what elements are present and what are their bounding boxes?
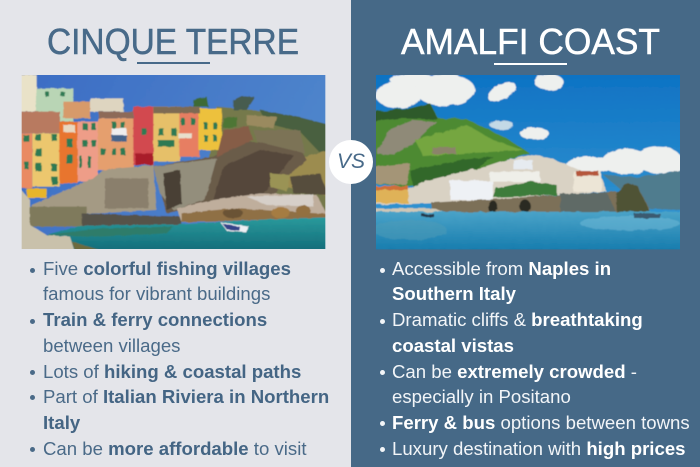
bullet list: Amalfi Coast facts — [380, 258, 690, 459]
photo: Amalfi town — [376, 75, 680, 250]
shutters — [23, 92, 217, 185]
cliffs — [153, 142, 307, 213]
heading: Amalfi Coast: AMALFI COAST — [401, 21, 660, 62]
bullet: ferry and bus: Ferry & bus options between towns — [392, 412, 690, 433]
bullet: train and ferry: Train & ferry connections — [43, 309, 267, 330]
bullet: cliffs: coastal vistas — [392, 335, 514, 356]
bullet: crowded: especially in Positano — [392, 386, 571, 407]
bullet: train and ferry: between villages — [43, 335, 180, 356]
clouds — [376, 73, 683, 174]
buildings — [20, 75, 37, 112]
bullet: Naples: Accessible from Naples in — [392, 258, 611, 279]
bullet: affordable: Can be more affordable to visit — [43, 438, 307, 459]
sea wall — [32, 165, 157, 213]
bullet: Naples: Southern Italy — [392, 283, 516, 304]
VS badge: VS — [337, 150, 365, 173]
bullet: Naples — [380, 258, 611, 304]
bullet: Italian Riviera: Part of Italian Riviera in Northern — [43, 386, 329, 407]
sea — [46, 216, 326, 249]
boats — [421, 213, 434, 217]
distant mountains — [603, 170, 683, 210]
bullet: hiking: Lots of hiking & coastal paths — [43, 361, 301, 382]
bullet: luxury: Luxury destination with high prices — [392, 438, 686, 459]
hill — [373, 103, 530, 187]
town — [373, 155, 607, 205]
foreground rocks — [22, 190, 75, 249]
VS badge — [329, 140, 373, 184]
bullet: Italian Riviera: Italy — [43, 412, 80, 433]
sea — [373, 212, 683, 253]
bullet: colorful fishing villages: famous for vibrant buildings — [43, 283, 270, 304]
heading underline — [137, 62, 210, 64]
bullet: colorful fishing villages: Five colorful fishing villages — [43, 258, 291, 279]
boat — [221, 223, 249, 232]
bullet: train and ferry — [30, 309, 267, 356]
bullet: crowded: Can be extremely crowded - — [392, 361, 637, 382]
hillside — [208, 106, 326, 212]
bullet: Italian Riviera — [30, 386, 329, 433]
heading underline — [494, 63, 567, 65]
panel: Amalfi Coast — [351, 0, 700, 467]
panel: Cinque Terre — [22, 28, 328, 455]
bullet list: Cinque Terre facts — [30, 258, 329, 459]
harbour wall — [430, 190, 650, 214]
photo: Riomaggiore harbour — [22, 75, 326, 249]
boulders — [177, 193, 328, 222]
bullet: cliffs — [380, 309, 643, 356]
bullet: colorful fishing villages — [30, 258, 291, 304]
heading: Cinque Terre: CINQUE TERRE — [47, 21, 299, 62]
bullet: cliffs: Dramatic cliffs & breathtaking — [392, 309, 643, 330]
bullet: crowded — [380, 361, 637, 407]
